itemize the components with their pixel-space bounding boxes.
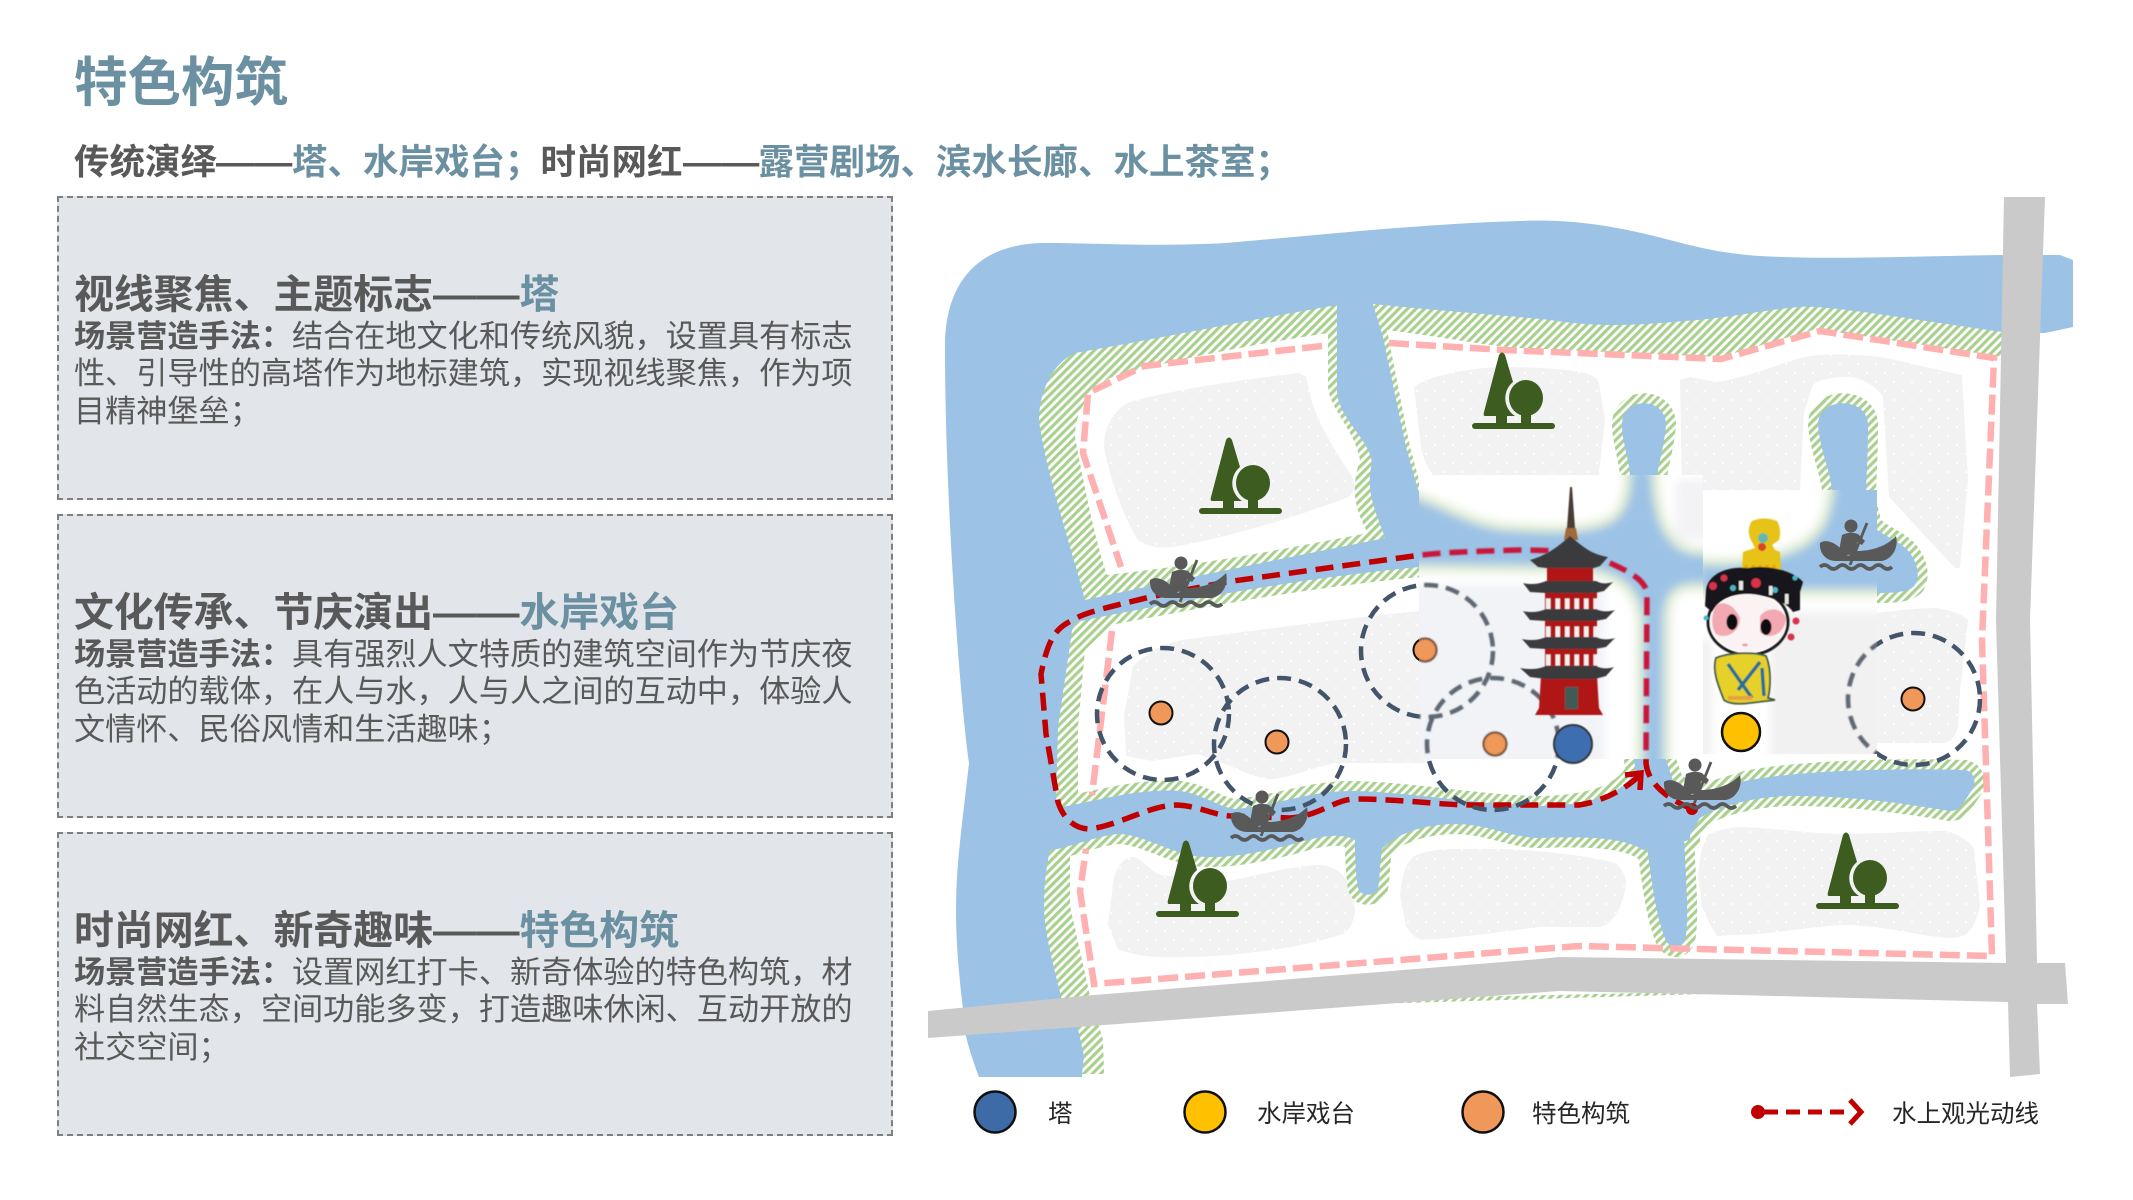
- feature structure markers: [1150, 638, 1924, 756]
- text: tower: [74, 319, 853, 429]
- land parcel: northwest bank: [1039, 305, 1385, 600]
- tower marker: [1554, 725, 1592, 763]
- legend: water route: 水上观光动线: [1892, 1100, 2039, 1128]
- waterfront stage marker: [1722, 713, 1760, 751]
- legend: waterfront stage: 水岸戏台: [1257, 1100, 1355, 1128]
- land parcel: main interior: [1070, 329, 2010, 1005]
- legend: water route: [1751, 1100, 2039, 1128]
- heading: waterfront stage: 文化传承、节庆演出 水岸戏台: [74, 591, 679, 635]
- panel: tower: [57, 196, 893, 500]
- feature radius circles: [1097, 585, 1980, 810]
- heading: feature structures: ——: [433, 909, 520, 953]
- text: waterfront stage: 文情怀、民俗风情和生活趣味；: [74, 712, 510, 747]
- text: feature structures: 社交空间；: [74, 1030, 230, 1065]
- heading: tower: ——: [433, 273, 520, 317]
- text: waterfront stage: 色活动的载体，在人与水，人与人之间的互动中，体验人: [74, 674, 853, 709]
- icon: boat 3: [1231, 790, 1308, 840]
- subtitle: 传统演绎 塔、水岸戏台；时尚网红 露营剧场、滨水长廊、水上茶室；: [74, 142, 1291, 182]
- legend: tower: 塔: [1048, 1100, 1072, 1128]
- water sightseeing route: [1041, 550, 1698, 829]
- text: feature structures: 场景营造手法：设置网红打卡、新奇体验的特色构筑，材: [74, 955, 853, 990]
- land parcel: northwest interior: [1075, 333, 1368, 575]
- illustration: pagoda: [1520, 487, 1615, 715]
- subtitle: ——: [216, 142, 292, 182]
- heading: waterfront stage: ——: [433, 591, 520, 635]
- legend: waterfront stage: [1184, 1092, 1355, 1132]
- icon: tree D: [1816, 832, 1899, 909]
- panel: waterfront stage: [57, 514, 893, 818]
- illustration: opera figure: [1704, 518, 1803, 704]
- text: waterfront stage: [74, 637, 853, 747]
- green blocks: [1104, 354, 1980, 957]
- road network: [928, 197, 2068, 1077]
- heading: tower: 视线聚焦、主题标志 塔: [74, 273, 559, 317]
- icon: tree A: [1199, 438, 1282, 514]
- icon: tree B: [1472, 352, 1555, 429]
- blurred image patch behind opera figure: [1703, 490, 1877, 754]
- channel banks: [1040, 403, 1974, 947]
- legend: [974, 1092, 2039, 1132]
- panel: feature structures: [57, 832, 893, 1136]
- river: [945, 221, 2073, 1077]
- text: tower: 性、引导性的高塔作为地标建筑，实现视线聚焦，作为项: [74, 356, 853, 391]
- text: feature structures: 料自然生态，空间功能多变，打造趣味休闲、互动开放的: [74, 992, 853, 1027]
- water channels: [1040, 403, 1974, 947]
- legend: feature structure: 特色构筑: [1532, 1100, 1630, 1128]
- subtitle: ——: [683, 142, 759, 182]
- icon: boat 4: [1664, 758, 1741, 808]
- icon: boat 2: [1820, 520, 1897, 569]
- river bank south of road: [1076, 1015, 1104, 1074]
- text: waterfront stage: 场景营造手法：具有强烈人文特质的建筑空间作为节庆夜: [74, 637, 853, 672]
- icon: tree C: [1156, 840, 1239, 917]
- legend: feature structure: [1462, 1092, 1630, 1132]
- text: tower: 目精神堡垒；: [74, 394, 261, 429]
- site boundary dashed line: [1080, 331, 1994, 984]
- title: 特色构筑: [74, 54, 288, 113]
- heading: feature structures: 时尚网红、新奇趣味 特色构筑: [74, 909, 679, 953]
- text: tower: 场景营造手法：结合在地文化和传统风貌，设置具有标志: [74, 319, 853, 354]
- icon: boat 1: [1150, 556, 1227, 606]
- land parcel: main bank: [1044, 304, 2010, 1012]
- blurred image patch behind pagoda: [1419, 475, 1703, 759]
- text: feature structures: [74, 955, 853, 1065]
- site map with legend: [928, 197, 2073, 1134]
- legend: tower: [974, 1092, 1072, 1132]
